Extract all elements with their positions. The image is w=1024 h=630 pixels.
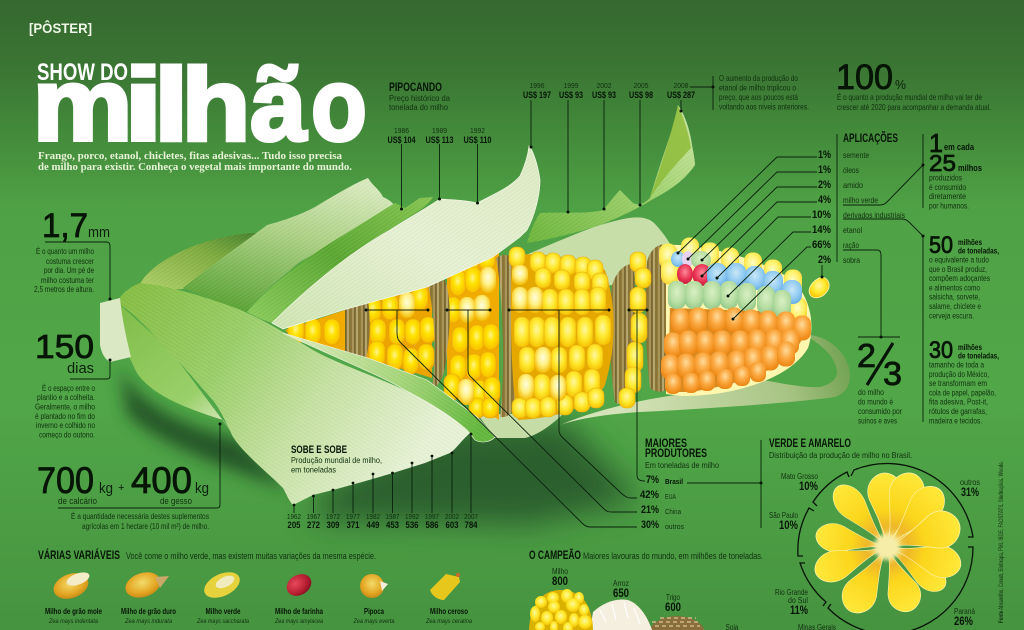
- wheat pile: [649, 616, 705, 630]
- panel: the champion crops: Milho: [552, 566, 568, 576]
- panel: corn price history: O aumento da produção do: [719, 73, 798, 83]
- panel: production in Brazil: VERDE E AMARELO: [769, 436, 851, 450]
- panel: world production: 2002: [445, 512, 459, 521]
- callout: 150 days: inverno e colhido no: [36, 420, 95, 430]
- panel: world production: 1972: [326, 512, 340, 521]
- circular kernel chart: São Paulo: [769, 510, 798, 520]
- panel: varieties: Zea mays saccharata: [196, 618, 249, 625]
- callout: 1.7 mm: É o quanto um milho: [36, 246, 94, 256]
- panel: world production: SOBE E SOBE: [291, 444, 347, 456]
- callout: 1.7 mm: 2,5 metros de altura.: [34, 284, 94, 294]
- callout: 1.7 mm: 1,7: [42, 207, 88, 245]
- panel: world production: 1987: [386, 512, 400, 521]
- title: h: [182, 47, 250, 162]
- panel: world production: 1967: [306, 512, 320, 521]
- panel: biggest producers: PRODUTORES: [645, 446, 707, 460]
- panel: applications: derivados industriais: [843, 210, 905, 220]
- panel: world production: 1992: [405, 512, 419, 521]
- loose kernel: [809, 277, 829, 298]
- panel: world production: 371: [346, 520, 360, 531]
- callout: 100%: [836, 58, 991, 112]
- panel: corn price history: voltando aos níveis anteriores.: [719, 102, 809, 112]
- panel: world production: 1962: [287, 512, 301, 521]
- circular kernel chart: outros: [960, 477, 980, 487]
- callout: one in 25: [929, 128, 982, 210]
- callout: two thirds: [857, 337, 902, 426]
- callout: 1.7 mm: por dia. Um pé de: [44, 265, 94, 275]
- callout: one in 25: produzidos: [929, 172, 962, 182]
- panel: corn price history: Preço histórico da: [389, 93, 450, 103]
- panel: corn price history: 1989: [432, 126, 447, 135]
- panel: corn price history: [388, 73, 809, 214]
- panel: corn price history: 2008: [674, 81, 688, 90]
- panel: world production: 1982: [366, 512, 380, 521]
- panel: biggest producers: 42%: [640, 489, 659, 501]
- circular kernel chart: Mato Grosso: [781, 471, 818, 481]
- panel: applications: semente: [843, 150, 869, 160]
- callout: one in 25: por humanos.: [929, 200, 969, 210]
- corn cob illustration with husk: [100, 105, 850, 505]
- callout: 50 million tons: salame, chiclete e: [929, 301, 981, 311]
- panel: biggest producers: China: [665, 507, 682, 516]
- panel: world production: 1997: [425, 512, 439, 521]
- callout: 150 days: dias: [67, 360, 94, 377]
- panel: corn price history: US$ 113: [426, 135, 454, 146]
- panel: applications: etanol: [843, 225, 862, 235]
- panel: the champion crops: 800: [552, 574, 568, 588]
- silk gaps: [345, 244, 672, 417]
- kernels: colour-coded section: [659, 238, 811, 396]
- callout: two thirds: 2: [857, 337, 876, 374]
- panel: corn price history: 1992: [470, 126, 485, 135]
- panel: corn price history: 2005: [634, 81, 648, 90]
- panel: applications: ração: [843, 240, 859, 250]
- panel: biggest producers: 7%: [646, 474, 659, 486]
- callout: two thirds: consumido por: [858, 406, 902, 416]
- callout: 100%: %: [895, 77, 906, 92]
- panel: world production: 536: [406, 520, 418, 531]
- callout: 50 million tons: compõem adoçantes: [929, 273, 990, 283]
- panel: varieties: Milho de grão duro: [121, 607, 176, 616]
- callout: 700 kg + 400 kg: kg: [195, 480, 209, 497]
- icon: kernel mole: [50, 569, 92, 603]
- callout: one in 25: 1: [929, 128, 943, 158]
- callout: two thirds: do milho: [858, 387, 884, 397]
- title: ã: [250, 47, 307, 162]
- panel: world production: 586: [426, 520, 438, 531]
- callout: 150 days: É o espaço entre o: [42, 383, 95, 393]
- kernels: large section: [509, 247, 651, 420]
- panel: applications: óleos: [843, 165, 859, 175]
- front husk leaf: [117, 283, 470, 505]
- back stalk leaf: [560, 335, 850, 425]
- icon: kernel ceroso: [430, 573, 460, 600]
- source note: Fonte Abramilho, Conab, Embrapa, FMI, IBGE, FAOSTATS, Sindirações, Woode.: [998, 461, 1005, 623]
- circular kernel chart: 10%: [799, 479, 818, 493]
- circular kernel chart: [769, 463, 980, 630]
- panel: applications: [676, 130, 924, 422]
- panel: applications: 10%: [812, 209, 831, 221]
- callout: 700 kg + 400 kg: 700: [37, 460, 94, 501]
- callout: 50 million tons: [929, 232, 999, 320]
- callout: 30 million tons: cola de papel, papelão,: [929, 388, 996, 398]
- title: i: [124, 47, 163, 162]
- subtitle: [38, 150, 352, 173]
- callout: one in 25: é consumido: [929, 182, 966, 192]
- callout: 30 million tons: 30: [929, 337, 953, 364]
- panel: varieties: Zea mays amylacea: [274, 618, 323, 625]
- panel: production in Brazil: [769, 436, 980, 630]
- icon: kernel duro: [122, 568, 169, 602]
- circular kernel chart: 10%: [779, 518, 798, 532]
- corn cast shadow: [118, 365, 640, 525]
- panel: applications: 4%: [818, 194, 831, 206]
- callout: 150 days: [35, 328, 112, 440]
- panel: varieties: Zea mays everta: [353, 618, 395, 625]
- panel: varieties: Você come o milho verde, mas existem muitas variações da mesma espécie.: [126, 551, 376, 561]
- callout: 30 million tons: rótulos de garrafas,: [929, 406, 987, 416]
- panel: corn price history: US$ 287: [667, 90, 695, 101]
- leaf tip inner: [650, 105, 691, 198]
- panel: biggest producers: 21%: [641, 504, 659, 516]
- panel: applications: 66%: [812, 239, 831, 251]
- callout: 100%: É o quanto a produção mundial de milho vai ter de: [837, 92, 982, 102]
- panel: applications: 1%: [818, 164, 831, 176]
- dark back leaf: [140, 233, 265, 289]
- panel: varieties: VÁRIAS VARIÁVEIS: [38, 547, 120, 562]
- callout: 30 million tons: milhões: [958, 343, 982, 352]
- panel: corn price history: US$ 93: [559, 90, 583, 101]
- callout: 1.7 mm: costuma crescer: [46, 256, 94, 266]
- panel: corn price history: US$ 104: [388, 135, 416, 146]
- callout: 30 million tons: se transformam em: [929, 378, 987, 388]
- circular kernel chart: 26%: [954, 614, 973, 628]
- circular kernel chart: Rio Grande: [775, 587, 808, 597]
- callout: 30 million tons: de toneladas,: [958, 352, 999, 360]
- callout: 700 kg + 400 kg: de calcário: [58, 496, 97, 506]
- panel: varieties: Zea mays ceratina: [425, 618, 472, 625]
- panel: biggest producers: MAIORES: [645, 436, 687, 450]
- callout: 30 million tons: fita adesiva, Post-it,: [929, 396, 988, 406]
- title: SHOW DO: [37, 59, 128, 86]
- panel: world production: 205: [288, 520, 301, 531]
- title: m: [33, 47, 133, 162]
- subtitle: Frango, porco, etanol, chicletes, fitas adesivas... Tudo isso precisa: [38, 150, 342, 162]
- panel: biggest producers: [640, 436, 762, 531]
- panel: the champion crops: 650: [613, 586, 629, 600]
- panel: corn price history: US$ 98: [629, 90, 653, 101]
- panel: the champion crops: Trigo: [666, 592, 680, 602]
- panel: varieties: Milho de farinha: [275, 607, 323, 616]
- panel: corn price history: 1986: [394, 126, 409, 135]
- panel: corn price history: PIPOCANDO: [389, 80, 442, 94]
- panel: biggest producers: Brasil: [665, 477, 683, 486]
- callout: 1.7 mm: mm: [88, 224, 110, 241]
- green leaf strip right: [527, 105, 695, 243]
- panel: world production: 1977: [346, 512, 360, 521]
- callout: two thirds: 3: [883, 355, 902, 392]
- panel: world production: 272: [307, 520, 320, 531]
- panel: varieties: Milho verde: [206, 607, 241, 616]
- callout: 50 million tons: de toneladas,: [958, 246, 999, 256]
- circular kernel chart: Paraná: [954, 606, 975, 616]
- green husk strip under corn: [283, 333, 495, 442]
- panel: biggest producers: Em toneladas de milho: [645, 460, 719, 470]
- pale leaf under corn: [478, 412, 565, 438]
- callout: 50 million tons: que o Brasil produz,: [929, 264, 987, 274]
- callout: 30 million tons: madeira e tecidos.: [929, 416, 982, 426]
- green strip leaf: [247, 197, 433, 323]
- callout: 30 million tons: tamanho de toda a: [929, 360, 984, 370]
- panel: varieties: [38, 547, 472, 625]
- panel: corn price history: 2002: [596, 81, 612, 90]
- panel: applications: APLICAÇÕES: [843, 130, 898, 145]
- panel: varieties: Pipoca: [364, 607, 384, 616]
- panel: applications: 1%: [818, 149, 831, 161]
- circular kernel chart: 11%: [790, 603, 808, 617]
- husk tip: [100, 298, 131, 362]
- callout: 700 kg + 400 kg: de gesso: [160, 496, 192, 506]
- callout: 150 days: é plantado no fim do: [35, 411, 95, 421]
- kernels: wedge sections: [285, 250, 500, 420]
- callout: 700 kg + 400 kg: 400: [131, 460, 192, 501]
- callout: 150 days: começo do outono.: [39, 430, 95, 440]
- corn pile: [529, 589, 593, 630]
- callout: 50 million tons: milhões: [958, 238, 982, 247]
- panel: production in Brazil: Distribuição da produção de milho no Brasil.: [769, 450, 912, 460]
- panel: corn price history: etanol de milho triplicou o: [719, 82, 796, 92]
- panel: world production: [287, 433, 478, 531]
- title: o: [311, 47, 367, 162]
- panel: varieties: Milho de grão mole: [45, 607, 102, 616]
- panel: corn price history: US$ 197: [523, 90, 551, 101]
- panel: applications: 14%: [812, 224, 831, 236]
- panel: corn price history: tonelada do milho: [389, 102, 448, 112]
- callout: 30 million tons: [929, 337, 999, 426]
- callout: 1.7 mm: milho costuma ter: [41, 275, 94, 285]
- panel: varieties: Zea mays indentata: [48, 618, 98, 625]
- panel: world production: 2007: [464, 512, 478, 521]
- panel: the champion crops: O CAMPEÃO: [529, 547, 581, 562]
- panel: world production: Produção mundial de milho,: [291, 455, 382, 465]
- pale top leaf: [183, 178, 396, 312]
- icon: kernel farinha: [283, 570, 315, 600]
- icon: kernel verde: [200, 567, 244, 603]
- panel: biggest producers: outros: [665, 522, 684, 531]
- callout: 700 kg + 400 kg: É a quantidade necessária destes suplementos: [71, 511, 209, 521]
- callout: two thirds: suínos e aves: [858, 416, 897, 426]
- callout: 150 days: plantio e a colheita.: [37, 392, 95, 402]
- panel: world production: 603: [446, 520, 458, 531]
- panel: world production: 453: [386, 520, 399, 531]
- callout: 700 kg + 400 kg: kg: [99, 480, 113, 497]
- back right leaf: [510, 217, 676, 290]
- callout: 50 million tons: 50: [929, 232, 953, 259]
- callout: 50 million tons: cerveja escura.: [929, 310, 974, 320]
- circular kernel chart: 31%: [961, 485, 979, 499]
- panel: the champion crops: [529, 547, 763, 630]
- icon: kernel pipoca: [360, 574, 388, 598]
- callout: one in 25: diretamente: [929, 191, 966, 201]
- callout: 700 kg + 400 kg: +: [118, 482, 124, 494]
- callout: 150 days: 150: [35, 328, 94, 365]
- panel: the champion crops: Arroz: [613, 578, 629, 588]
- callout: 150 days: Geralmente, o milho: [35, 402, 95, 412]
- panel: world production: 784: [464, 520, 478, 531]
- callout: 700 kg + 400 kg: agrícolas em 1 hectare (10 mil m²) de milho.: [82, 521, 209, 531]
- callout: 50 million tons: e alimentos como: [929, 282, 980, 292]
- panel: the champion crops: Maiores lavouras do mundo, em milhões de toneladas.: [583, 551, 763, 561]
- poster tag: [PÔSTER]: [29, 19, 92, 36]
- panel: corn price history: 1996: [530, 81, 544, 90]
- callout: 50 million tons: salsicha, sorvete,: [929, 292, 980, 302]
- title: l: [154, 47, 188, 162]
- panel: applications: sobra: [843, 255, 860, 265]
- panel: corn price history: preço, que aos poucos está: [719, 92, 798, 102]
- rice pile: [590, 600, 652, 630]
- panel: varieties: Milho ceroso: [430, 607, 468, 616]
- callout: 1.7 mm: [34, 207, 112, 300]
- milk line on corn to producers: [364, 308, 648, 527]
- panel: world production: 449: [366, 520, 380, 531]
- callout: one in 25: 25: [929, 150, 956, 176]
- callout: 700 kg + 400 kg: [37, 422, 222, 531]
- pale husk leaf above corn: [272, 146, 540, 329]
- panel: biggest producers: 30%: [641, 519, 659, 531]
- panel: varieties: Zea mays indurata: [124, 618, 172, 625]
- panel: corn price history: US$ 93: [592, 90, 616, 101]
- panel: the champion crops: 600: [665, 600, 681, 614]
- panel: applications: 2%: [818, 179, 831, 191]
- subtitle: de milho para existir. Conheça o vegetal mais importante do mundo.: [38, 161, 352, 173]
- callout: one in 25: milhos: [958, 163, 982, 174]
- panel: applications: milho verde: [843, 195, 878, 205]
- panel: biggest producers: EUA: [665, 492, 676, 501]
- panel: world production: em toneladas: [291, 464, 336, 474]
- callout: one in 25: em cada: [944, 142, 975, 153]
- under fold of front leaf: [117, 302, 245, 450]
- panel: applications: 2%: [818, 254, 831, 266]
- callout: 30 million tons: produção do México,: [929, 369, 989, 379]
- panel: applications: amido: [843, 180, 863, 190]
- circular kernel chart: do Sul: [788, 595, 808, 605]
- panel: corn price history: 1999: [564, 81, 578, 90]
- callout: 100%: 100: [836, 58, 893, 97]
- callout: two thirds: do mundo é: [858, 396, 893, 406]
- panel: world production: 309: [326, 520, 340, 531]
- title: [33, 47, 367, 162]
- panel: corn price history: US$ 110: [464, 135, 492, 146]
- callout: 50 million tons: o equivalente a tudo: [929, 254, 989, 264]
